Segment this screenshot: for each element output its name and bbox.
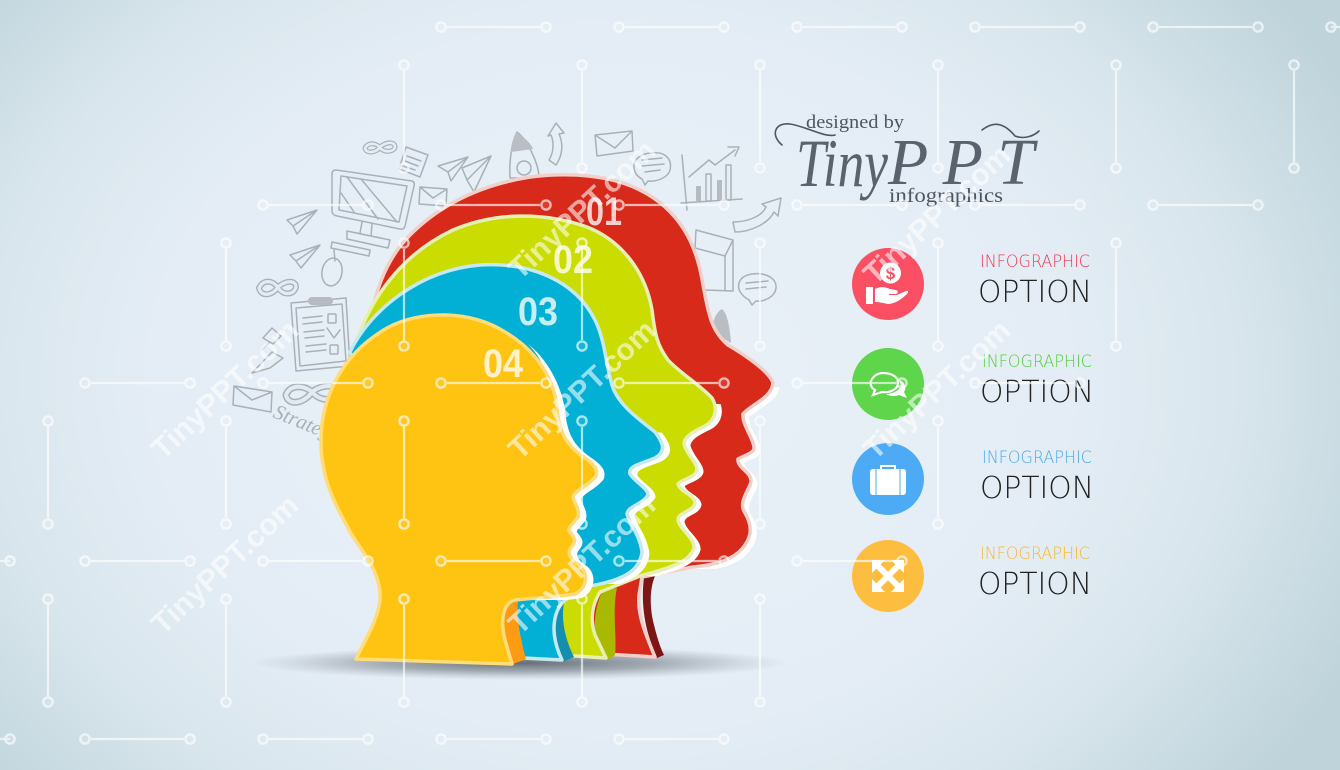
watermarks: TinyPPT.com xyxy=(502,134,662,286)
watermarks: TinyPPT.com xyxy=(145,489,305,641)
option 1 label: INFOGRAPHIC xyxy=(980,252,1090,271)
doodle: infinity lower xyxy=(286,386,338,402)
option 2 title: OPTION xyxy=(980,375,1094,410)
watermarks: TinyPPT.com xyxy=(857,314,1017,466)
option 1 xyxy=(852,248,1092,320)
number 01: 01 xyxy=(586,190,622,234)
head 03 blue xyxy=(350,265,668,662)
logo swash xyxy=(775,124,1039,145)
option 4 label: INFOGRAPHIC xyxy=(980,544,1090,563)
doodle: monitor xyxy=(331,170,414,261)
icon: expand arrows xyxy=(852,540,924,612)
number 04: 04 xyxy=(483,342,524,386)
option 3 xyxy=(852,443,1094,515)
watermarks xyxy=(145,134,1017,641)
number 02: 02 xyxy=(553,238,593,282)
doodle: envelope centre xyxy=(419,187,447,206)
icon: briefcase xyxy=(852,443,924,515)
doodle: curved arrow up xyxy=(548,123,564,165)
doodle: envelope small xyxy=(233,386,272,412)
doodle: rocket right xyxy=(712,309,731,343)
logo: designed by TinyPPT infographics xyxy=(775,112,1039,207)
doodle: pushpin xyxy=(252,328,283,373)
watermarks: TinyPPT.com xyxy=(502,489,662,641)
doodle sketches behind heads xyxy=(233,123,781,448)
icon: hand with coin: $ xyxy=(886,264,896,283)
head 04 yellow xyxy=(321,315,603,664)
icon: hand with coin xyxy=(852,248,924,320)
head 01 red xyxy=(370,175,778,658)
option 3 title: OPTION xyxy=(980,471,1094,506)
option 2 xyxy=(852,348,1094,420)
ground shadow xyxy=(252,646,788,680)
doodle: clipboard checklist xyxy=(291,297,350,371)
doodle: paper planes xyxy=(438,156,491,192)
doodle: infinity top xyxy=(365,143,395,152)
logo wordmark Tiny: Tiny xyxy=(796,125,889,201)
doodle: rocket xyxy=(510,132,539,178)
head 02 green xyxy=(355,216,720,660)
doodle: speech bubble top xyxy=(634,153,670,185)
doodle: growth chart xyxy=(681,147,742,210)
watermarks: TinyPPT.com xyxy=(857,139,1017,291)
icon: speech bubbles xyxy=(852,348,924,420)
option 1 title: OPTION xyxy=(978,275,1092,310)
watermarks: TinyPPT.com xyxy=(145,314,305,466)
doodle: note card xyxy=(399,147,428,177)
doodle: infinity left xyxy=(259,282,296,294)
option 3 label: INFOGRAPHIC xyxy=(982,448,1092,467)
panel: four layered heads xyxy=(321,175,778,664)
number 03: 03 xyxy=(518,290,558,334)
option 4 xyxy=(852,540,1092,612)
doodle: paper plane one xyxy=(287,210,317,234)
doodle: arrow right xyxy=(733,198,781,232)
doodle: strategy lettering: Strategy xyxy=(270,399,345,448)
logo wordmark PPT: PPT xyxy=(887,126,1038,199)
option 2 label: INFOGRAPHIC xyxy=(982,352,1092,371)
watermarks: TinyPPT.com xyxy=(502,314,662,466)
logo subtitle: infographics xyxy=(889,185,1003,207)
doodle: speech bubble right xyxy=(739,274,776,305)
logo tagline: designed by xyxy=(806,112,905,133)
option 4 title: OPTION xyxy=(978,567,1092,602)
doodle: paper plane two xyxy=(290,245,320,268)
doodle: envelope top xyxy=(595,131,633,156)
doodle: cube note xyxy=(695,230,733,291)
doodle: mouse xyxy=(320,256,344,288)
